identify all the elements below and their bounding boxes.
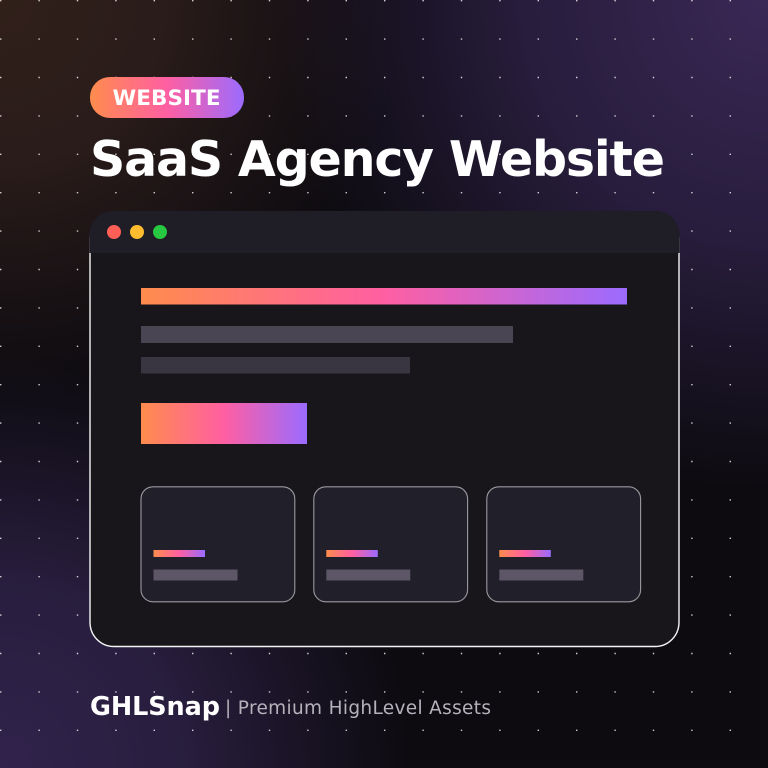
call to action button	[141, 403, 307, 444]
badge: WEBSITE: WEBSITE	[112, 86, 220, 111]
card 2	[314, 487, 468, 602]
card 1	[141, 487, 295, 602]
footer tagline: | Premium HighLevel Assets	[225, 698, 491, 719]
traffic light: yellow	[130, 225, 144, 239]
text line 1	[141, 326, 513, 343]
card 3	[487, 487, 641, 602]
title: SaaS Agency Website	[90, 131, 665, 188]
text line 2	[141, 357, 410, 374]
traffic light: green	[153, 225, 167, 239]
window body	[90, 215, 679, 646]
footer brand: GHLSnap: GHLSnap	[90, 692, 220, 722]
badge: WEBSITE	[90, 77, 244, 118]
browser window mockup	[89, 211, 680, 646]
window title bar	[89, 211, 680, 253]
traffic light: red	[107, 225, 121, 239]
hero headline bar	[141, 288, 627, 304]
